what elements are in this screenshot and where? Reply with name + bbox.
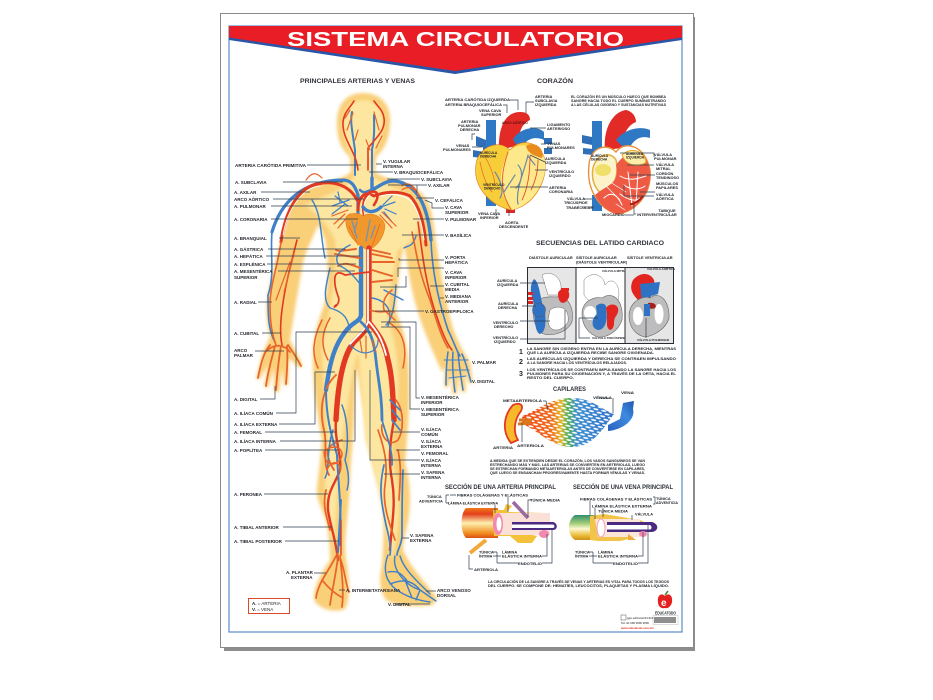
- exterior heart labels: AURÍCULA: [480, 150, 498, 155]
- arteriole: [518, 420, 532, 424]
- heading: secuencias del latido cardiaco: SECUENCIAS DEL LATIDO CARDIACO: [536, 240, 664, 247]
- artery labels: SUPERIOR: [234, 275, 258, 280]
- vein labels: V. CEFÁLICA: [435, 197, 464, 203]
- section heart labels: VÁLVULA: [567, 196, 585, 201]
- artery labels: ARCO: [234, 348, 248, 353]
- frame 3: ventricular systole: VÁLVULA PULMONAR: [637, 337, 670, 342]
- artery labels: LÁMINA ELÁSTICA EXTERNA: [448, 500, 498, 506]
- publisher logo: [653, 591, 678, 624]
- exterior heart labels: ARTERIA BRAQUIOCEFÁLICA: [445, 102, 502, 107]
- vein labels: V. PULMONAR: [445, 217, 477, 222]
- capillary net: [522, 398, 614, 447]
- artery labels: A. HEPÁTICA: [234, 253, 264, 259]
- exterior heart labels: PULMONARES: [443, 147, 471, 152]
- vein labels: V. SUBCLAVIA: [421, 177, 453, 182]
- artery labels: A. PERONEA: [234, 492, 263, 497]
- steps: LAS AURÍCULAS IZQUIERDA Y DERECHA SE CONTRAEN IMPULSANDO: [527, 356, 676, 361]
- vein labels: V. AXILAR: [428, 183, 450, 188]
- section heart labels: DERECHA: [591, 158, 608, 162]
- vein labels: V. MESENTÉRICA: [421, 393, 460, 400]
- exterior heart labels: DERECHA: [460, 127, 479, 132]
- exterior heart labels: LIGAMENTO: [547, 122, 570, 127]
- exterior heart labels: VENA CAVA: [479, 108, 501, 113]
- vein labels: V. ILÍACA: [421, 456, 442, 463]
- frame labels: [493, 278, 519, 344]
- vein labels: V. BRAQUIOCEFÁLICA: [394, 169, 444, 175]
- title banner: [229, 26, 682, 74]
- exterior heart labels: CORONARIA: [549, 189, 573, 194]
- exterior heart labels: [443, 94, 575, 229]
- vein vessel: [608, 401, 634, 431]
- capillary labels: [493, 390, 634, 450]
- section heart drawing: [582, 110, 650, 214]
- vein labels: EXTERNA: [410, 538, 432, 543]
- exterior heart labels: PULMONARES: [547, 145, 575, 150]
- artery labels: A. CORONARIA: [234, 217, 268, 222]
- steps: QUE LA AURÍCULA IZQUIERDA RECIBE SANGRE OXIGENADA.: [527, 350, 654, 355]
- vein labels: [575, 496, 678, 566]
- artery labels: ÍNTIMA: [479, 554, 493, 558]
- right leg vessels: [378, 400, 436, 602]
- panel: heart cross section: [564, 94, 679, 217]
- shoulder and chest arteries and veins: [272, 174, 431, 245]
- artery labels: TÚNICA: [427, 494, 442, 499]
- vein labels: V. CAVA: [445, 205, 463, 210]
- artery labels: ADVENTICIA: [419, 498, 443, 504]
- vein labels: INFERIOR: [445, 275, 467, 280]
- vein labels: ARCO VENOSO: [437, 588, 471, 593]
- section heart labels: [564, 151, 679, 217]
- vein labels: V. BASÍLICA: [445, 231, 472, 238]
- vein labels: INTERNA: [383, 164, 404, 169]
- heading: corazon: CORAZÓN: [537, 76, 573, 85]
- closing note: DEL CUERPO. SE COMPONE DE: HEMATÍES, LEUCOCITOS, PLAQUETAS Y PLASMA LÍQUIDO.: [488, 583, 669, 588]
- exterior heart labels: DESCENDENTE: [499, 224, 529, 229]
- frame 2: atrial systole: VÁLVULA MITRAL: [602, 268, 628, 273]
- title: SISTEMA CIRCULATORIO: [287, 28, 624, 51]
- artery labels: ELÁSTICA INTERNA: [502, 554, 542, 558]
- abdominal trunk: [314, 245, 405, 420]
- capillary description: ESTRECHANDO MÁS Y MÁS. LAS ARTERIAS SE CONVIERTEN EN ARTERIOLAS, LUEGO: [490, 462, 645, 467]
- exterior heart labels: ARTERIA CARÓTIDA IZQUIERDA: [445, 97, 510, 102]
- exterior heart labels: DERECHA: [480, 154, 497, 158]
- column captions: (DIÁSTOLE VENTRICULAR): [576, 260, 628, 264]
- publisher data: Tel. 91 000 0000 0000: [621, 621, 649, 625]
- corazon description: EL CORAZÓN ES UN MÚSCULO HUECO QUE BOMBEA: [571, 94, 666, 99]
- vein labels: ANTERIOR: [445, 299, 469, 304]
- vein labels: V. DIGITAL: [472, 379, 495, 384]
- artery labels: TÚNICA MEDIA: [530, 498, 560, 502]
- panel: human body figure: [256, 93, 473, 611]
- artery labels: LÁMINA: [502, 550, 517, 554]
- vein labels: TÚNICA: [575, 550, 590, 554]
- vein labels: SUPERIOR: [445, 210, 469, 215]
- corazon description: A LAS CÉLULAS OXÍGENO Y SUSTANCIAS NUTRITIVAS: [571, 102, 667, 107]
- frame 2: atrial systole: VÁLVULA TRICÚSPIDE: [592, 335, 625, 340]
- artery labels: [419, 492, 560, 572]
- artery labels: A. GÁSTRICA: [234, 246, 264, 252]
- column captions: SÍSTOLE VENTRICULAR: [627, 255, 673, 260]
- legend: V. = VENA: [252, 607, 273, 612]
- section heart labels: PAPILARES: [656, 185, 678, 190]
- vein labels: V. ILÍACA: [421, 425, 442, 432]
- vein labels: FIBRAS COLÁGENAS Y ELÁSTICAS: [580, 496, 652, 502]
- right labels and leader lines: [369, 159, 497, 607]
- panel: vein section: [569, 482, 678, 566]
- vein labels: ADVENTICIA: [656, 500, 678, 505]
- vein labels: V. MESENTÉRICA: [421, 405, 460, 412]
- artery labels: A. POPLÍTEA: [234, 446, 263, 453]
- artery labels: A. PULMONAR: [234, 204, 266, 209]
- frame 1: diastole: [520, 268, 576, 343]
- artery labels: A. TIBIAL POSTERIOR: [234, 539, 283, 544]
- capillary description: SE ESTRECHAN FORMANDO METAARTERIOLAS ANTES DE CONVERTIRSE EN CAPILARES,: [490, 467, 645, 471]
- vein labels: ELÁSTICA INTERNA: [598, 554, 638, 558]
- artery labels: ARTERIA CARÓTIDA PRIMITIVA: [235, 161, 307, 168]
- exterior heart labels: ARTERIA: [535, 94, 552, 99]
- exterior heart labels: SUPERIOR: [481, 112, 502, 117]
- exterior heart labels: ARTERIA: [461, 119, 478, 124]
- vein labels: INTERNA: [421, 463, 442, 468]
- artery labels: ARTERIOLA: [474, 567, 498, 572]
- section heart labels: MÚSCULOS: [656, 181, 679, 186]
- section heart labels: CORDÓN: [656, 171, 673, 176]
- vein labels: TÚNICA: [656, 496, 671, 501]
- panel: artery section: [419, 482, 560, 572]
- frame labels: DERECHO: [494, 324, 513, 329]
- section heart labels: VÁLVULA: [656, 162, 674, 167]
- artery labels: A. DIGITAL: [234, 397, 258, 402]
- capillary description: [490, 458, 645, 475]
- closing note: LA CIRCULACIÓN DE LA SANGRE A TRAVÉS DE VENAS Y ARTERIAS ES VITAL PARA TODOS LOS TEJIDOS: [488, 579, 670, 584]
- capillary labels: ARTERIOLA: [517, 443, 544, 448]
- column captions: DIÁSTOLE AURICULAR: [529, 255, 573, 260]
- vein labels: HEPÁTICA: [445, 259, 469, 265]
- exterior heart labels: AURÍCULA: [545, 156, 566, 161]
- frame labels: AURÍCULA: [497, 278, 518, 283]
- artery labels: EXTERNA: [291, 575, 313, 580]
- legend: [248, 598, 290, 614]
- vein labels: COMÚN: [421, 431, 438, 437]
- vein cutaway: [569, 514, 657, 541]
- vein labels: V. ILÍACA: [421, 437, 442, 444]
- vein labels: MEDIA: [445, 287, 460, 292]
- vein labels: TÚNICA MEDIA: [598, 508, 628, 514]
- vein labels: V. DIGITAL: [388, 602, 411, 607]
- steps: LA SANGRE SIN OXÍGENO ENTRA EN LA AURÍCULA DERECHA, MIENTRAS: [527, 346, 677, 351]
- frame 3: ventricular systole: VÁLVULA AÓRTICA: [647, 266, 676, 271]
- artery vessel: [505, 404, 522, 443]
- vein labels: INTERNA: [421, 475, 442, 480]
- panel: heartbeat sequence: [493, 255, 677, 380]
- vein labels: SUPERIOR: [421, 412, 445, 417]
- artery cutaway: [462, 502, 557, 553]
- vein labels: VÁLVULA: [635, 512, 653, 516]
- left labels and leader lines: [234, 161, 401, 593]
- exterior heart labels: VENA CAVA: [478, 211, 500, 216]
- section heart labels: AURÍCULA: [626, 151, 644, 156]
- artery labels: ENDOTELIO: [518, 561, 542, 566]
- artery labels: ARCO AÓRTICO: [234, 195, 270, 202]
- artery labels: A. ILÍACA INTERNA: [234, 437, 277, 444]
- body silhouette: [256, 93, 473, 611]
- section heart labels: VÁLVULA: [654, 152, 672, 157]
- exterior heart labels: DERECHO: [484, 186, 501, 190]
- vein labels: V. GASTROEPIPLOICA: [425, 309, 474, 314]
- closing note: [488, 579, 670, 588]
- vein labels: V. CAVA: [445, 270, 463, 275]
- column captions: SÍSTOLE AURICULAR: [576, 255, 617, 260]
- head vessels: [343, 101, 384, 178]
- vein labels: V. CUBITAL: [445, 282, 470, 287]
- vein labels: V. MEDIANA: [445, 294, 472, 299]
- exterior heart labels: VENTRÍCULO: [483, 182, 505, 187]
- capillary labels: ARTERIA: [493, 445, 513, 450]
- steps: PULMONES PARA SU OXIGENACIÓN Y, A TRAVÉS DE LA ORTA, HACIA EL: [527, 371, 677, 376]
- corazon description: [571, 94, 667, 107]
- artery labels: TÚNICA: [479, 550, 494, 554]
- frame labels: AURÍCULA: [498, 301, 519, 306]
- heading: seccion arteria: SECCIÓN DE UNA ARTERIA PRINCIPAL: [445, 482, 556, 491]
- exterior heart labels: SUBCLAVIA: [535, 98, 558, 103]
- artery labels: A. PLANTAR: [286, 570, 314, 575]
- frame 3: ventricular systole: [626, 266, 676, 343]
- artery labels: PALMAR: [234, 353, 254, 358]
- vein labels: V. SAFENA: [410, 533, 434, 538]
- vein labels: V. FEMORAL: [421, 451, 449, 456]
- exterior heart labels: VENAS: [456, 143, 470, 148]
- artery labels: A. SUBCLAVIA: [235, 180, 267, 185]
- exterior heart labels: IZQUIERDA: [535, 102, 557, 107]
- steps: RESTO DEL CUERPO.: [527, 376, 574, 380]
- exterior heart labels: AORTA: [505, 220, 519, 225]
- poster sheet: [220, 14, 695, 651]
- section heart labels: INTERVENTRICULAR: [637, 212, 677, 217]
- exterior heart labels: IZQUIERDA: [545, 160, 567, 165]
- vein labels: ENDOTELIO: [613, 561, 638, 566]
- section heart labels: IZQUIERDA: [626, 156, 645, 160]
- artery labels: A. MESENTÉRICA: [234, 267, 273, 274]
- vein labels: ÍNTIMA: [575, 554, 589, 558]
- central heart: [346, 213, 385, 250]
- vein labels: DORSAL: [437, 593, 456, 598]
- capillary labels: VENA: [621, 390, 634, 395]
- frame labels: DERECHA: [498, 305, 517, 310]
- heading: capilares: CAPILARES: [553, 386, 587, 393]
- frame 2: atrial systole: [576, 268, 628, 343]
- exterior heart labels: IZQUIERDO: [549, 173, 571, 178]
- vein labels: V. SAFENA: [421, 470, 445, 475]
- vein labels: LÁMINA ELÁSTICA EXTERNA: [592, 504, 652, 508]
- section heart labels: PULMONAR: [654, 156, 677, 161]
- publisher logo: e: [661, 598, 667, 609]
- vein labels: V. PALMAR: [472, 360, 497, 365]
- artery labels: A. CUBITAL: [234, 331, 259, 336]
- exterior heart labels: VENAS: [547, 141, 561, 146]
- artery labels: A. ILÍACA COMÚN: [234, 409, 273, 416]
- section heart labels: AURÍCULA: [591, 153, 609, 158]
- left leg vessels: [316, 375, 349, 607]
- exterior heart labels: INFERIOR: [480, 215, 499, 220]
- artery labels: A. TIBIAL ANTERIOR: [234, 525, 279, 530]
- exterior heart labels: ARTERIA: [549, 185, 566, 190]
- panel: exterior heart: [443, 94, 575, 229]
- section heart labels: TRICÚSPIDE: [564, 200, 588, 205]
- section heart labels: VÁLVULA: [656, 192, 674, 197]
- section heart labels: AÓRTICA: [656, 196, 674, 201]
- vein labels: EXTERNA: [421, 444, 443, 449]
- vein labels: V. YUGULAR: [383, 159, 411, 164]
- artery labels: FIBRAS COLÁGENAS Y ELÁSTICAS: [457, 492, 528, 498]
- left arm vessels: [258, 200, 325, 390]
- heading: seccion vena: SECCIÓN DE UNA VENA PRINCIPAL: [573, 482, 673, 491]
- steps: LOS VENTRÍCULOS SE CONTRAEN IMPULSANDO LA SANGRE HACIA LOS: [527, 367, 677, 372]
- vein labels: INFERIOR: [421, 400, 443, 405]
- section heart labels: MITRAL: [656, 166, 671, 171]
- artery labels: A. BRANQUIAL: [234, 236, 267, 241]
- section heart labels: TABIQUE: [658, 208, 676, 213]
- publisher data: [620, 615, 654, 630]
- vein labels: LÁMINA: [598, 550, 613, 554]
- heading: principales arterias y venas: PRINCIPALES ARTERIAS Y VENAS: [300, 78, 416, 85]
- capillary labels: VÉNULA: [593, 395, 612, 400]
- artery labels: A. AXILAR: [234, 190, 257, 195]
- steps: 2: [519, 359, 523, 366]
- artery labels: [234, 161, 401, 593]
- exterior heart labels: ARTERIOSO: [547, 126, 570, 131]
- artery labels: A. ILÍACA EXTERNA: [234, 420, 278, 427]
- frame labels: VENTRÍCULO: [493, 320, 518, 325]
- section heart labels: TENDINOSO: [656, 175, 679, 180]
- section heart labels: TRABÉCULAS: [566, 205, 593, 210]
- section heart labels: MIOCARDIO: [602, 212, 625, 217]
- frame labels: IZQUIERDO: [494, 339, 516, 344]
- column captions: [529, 255, 673, 264]
- capillary description: A MEDIDA QUE SE EXTIENDEN DESDE EL CORAZÓN, LOS VASOS SANGUÍNEOS SE VAN: [490, 458, 645, 463]
- frame border: [528, 268, 674, 344]
- panel: capillaries: [490, 386, 645, 475]
- capillary labels: METAARTERIOLA: [503, 398, 542, 403]
- vein labels: V. PORTA: [445, 255, 466, 260]
- exterior heart labels: ARCO AÓRTICO: [502, 120, 528, 125]
- steps: [519, 346, 677, 380]
- exterior heart labels: VENTRÍCULO: [549, 169, 574, 174]
- publisher data: www.educatodo.com.mx: [620, 626, 654, 630]
- frame labels: VENTRÍCULO: [493, 335, 518, 340]
- legend: A. = ARTERIA: [252, 601, 281, 606]
- steps: 3: [519, 371, 523, 378]
- artery labels: A. RADIAL: [234, 300, 257, 305]
- artery labels: A. ESPLÉNICA: [234, 260, 266, 267]
- steps: A LA SANGRE HACIA LOS VENTRÍCULOS RELAJADOS.: [527, 360, 627, 365]
- artery labels: A. INTERMETATARSIANA: [346, 588, 401, 593]
- right arm vessels: [404, 222, 471, 392]
- steps: 1: [519, 349, 523, 356]
- corazon description: SANGRE HACIA TODO EL CUERPO SUMINISTRANDO: [571, 99, 666, 103]
- vein labels: [383, 159, 497, 607]
- artery labels: A. FEMORAL: [234, 430, 262, 435]
- exterior heart drawing: [473, 112, 552, 213]
- frame labels: IZQUIERDA: [497, 282, 519, 287]
- publisher logo: EDUCATODO: [655, 610, 676, 616]
- exterior heart labels: PULMONAR: [458, 123, 481, 128]
- publisher data: gpo.editorial 84-612: [627, 616, 654, 620]
- capillary description: QUE LUEGO SE ENSANCHAN PROGRESIVAMENTE HASTA FORMAR VÉNULAS Y VENAS.: [490, 470, 645, 475]
